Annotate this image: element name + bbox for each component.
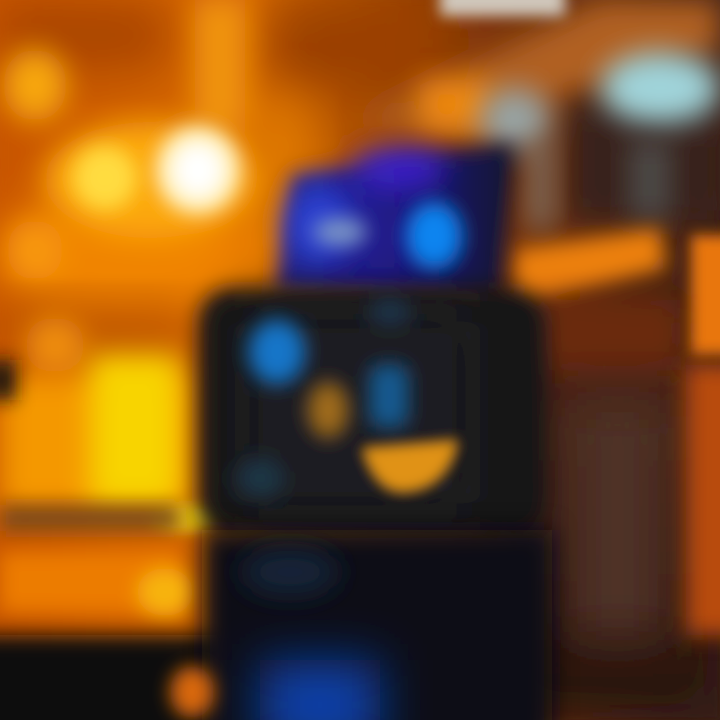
right orange band <box>515 228 680 640</box>
cream bar, top edge <box>470 0 535 2</box>
icon: dark blue top tile <box>368 298 412 326</box>
dark blob, left edge <box>0 370 2 390</box>
icon: blue circle <box>249 320 305 384</box>
bright lights <box>45 122 255 238</box>
yellow glow panel <box>0 355 221 532</box>
orange pillar, right edge upper <box>716 260 720 330</box>
phone, front device body <box>198 288 546 536</box>
floor shadow, lower centre <box>232 560 522 720</box>
icon: blue bar <box>370 365 408 427</box>
teal reflection tile <box>242 550 338 594</box>
orange glow, left side <box>0 0 260 373</box>
floor shadow, lower left <box>0 665 195 720</box>
icon: dim teal tile <box>236 458 284 498</box>
lower left streaks <box>0 505 193 616</box>
blue reflection <box>290 690 350 720</box>
orange pillar, right edge lower <box>716 395 720 605</box>
phone screen icons <box>236 298 458 498</box>
icon: orange circle <box>308 382 348 438</box>
orange floor light <box>170 666 214 718</box>
icon: orange smile <box>362 440 458 492</box>
tablet, back device <box>275 142 515 295</box>
upper right background lights <box>360 0 720 230</box>
